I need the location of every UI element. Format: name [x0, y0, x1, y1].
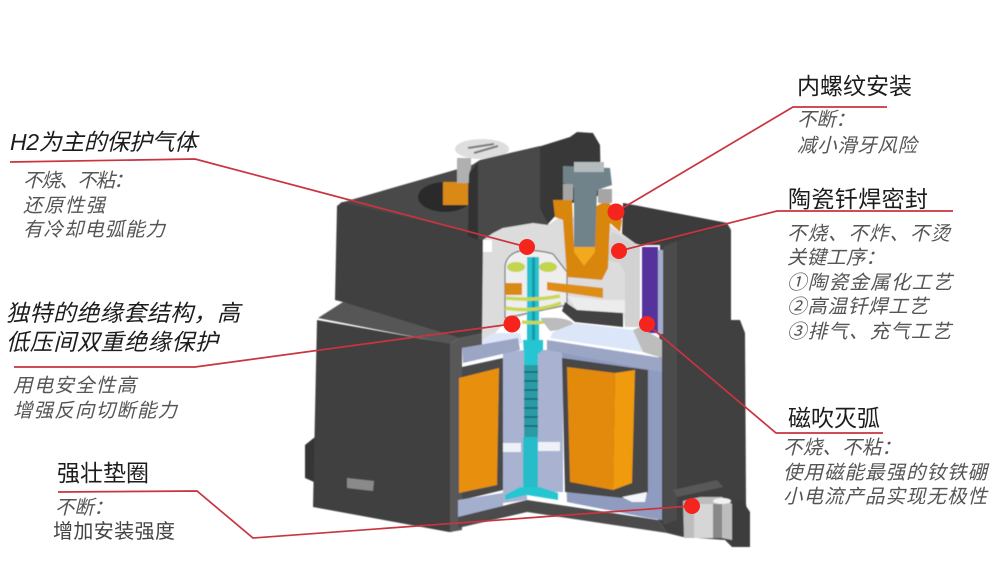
callout: H2 protective gas: 有冷却电弧能力	[23, 219, 166, 241]
callout: ceramic brazing seal: ③排气、充气工艺	[787, 321, 953, 343]
screw and orange terminal	[547, 162, 622, 298]
rear terminal plate	[468, 132, 601, 240]
callout: magnetic arc blowout: 不烧、不粘：	[783, 437, 901, 459]
callout: internal thread mounting: 内螺纹安装	[797, 73, 912, 99]
callout: ceramic brazing seal: 陶瓷钎焊密封	[788, 186, 928, 212]
callout: ceramic brazing seal: ②高温钎焊工艺	[787, 296, 930, 318]
left housing wall	[450, 333, 482, 532]
dark inner base	[562, 302, 623, 327]
callout: strong washer: 不断：	[55, 497, 113, 519]
pale blue wedges	[482, 323, 662, 358]
leader lines	[10, 107, 953, 538]
callout: ceramic brazing seal: 关键工序：	[787, 247, 885, 269]
central plunger	[503, 340, 560, 500]
callout: H2 protective gas: 还原性强	[23, 195, 106, 217]
callout: H2 protective gas: 不烧、不粘：	[23, 170, 133, 192]
upper left housing	[318, 165, 483, 344]
callout: insulation sleeve: 增强反向切断能力	[13, 400, 178, 422]
callout: insulation sleeve: 低压间双重绝缘保护	[6, 329, 221, 355]
callout: strong washer: 强壮垫圈	[57, 460, 149, 486]
callout: ceramic brazing seal: 不烧、不炸、不烫	[787, 223, 952, 245]
callout: magnetic arc blowout: 小电流产品实现无极性	[783, 486, 989, 508]
contact and coil assembly	[505, 257, 575, 342]
callout: magnetic arc blowout	[783, 405, 989, 508]
right coil section	[527, 340, 667, 533]
mounting washer tab	[683, 497, 750, 547]
callout: H2 protective gas	[10, 129, 200, 241]
lower left housing	[305, 320, 452, 532]
left coil section	[458, 338, 527, 528]
callout: ceramic brazing seal	[787, 186, 954, 343]
callout: insulation sleeve: 独特的绝缘套结构，高	[6, 300, 243, 326]
callout: strong washer	[53, 460, 175, 543]
right housing	[622, 203, 750, 547]
relay cutaway illustration	[305, 132, 750, 547]
marker dots	[504, 204, 700, 514]
callout: strong washer: 增加安装强度	[53, 520, 175, 543]
callout: insulation sleeve	[6, 300, 243, 422]
left terminal screw	[443, 139, 509, 205]
callout: internal thread mounting: 不断：	[797, 109, 855, 131]
callout: internal thread mounting	[797, 73, 919, 157]
callout: magnetic arc blowout: 使用磁能最强的钕铁硼	[783, 462, 989, 484]
callout: ceramic brazing seal: ①陶瓷金属化工艺	[787, 272, 954, 294]
purple magnet	[642, 247, 663, 334]
callout: insulation sleeve: 用电安全性高	[13, 375, 138, 397]
callout: H2 protective gas: H2为主的保护气体	[10, 129, 200, 155]
callout: internal thread mounting: 减小滑牙风险	[797, 135, 919, 157]
callout: magnetic arc blowout: 磁吹灭弧	[788, 405, 880, 431]
ceramic housing	[482, 215, 640, 340]
